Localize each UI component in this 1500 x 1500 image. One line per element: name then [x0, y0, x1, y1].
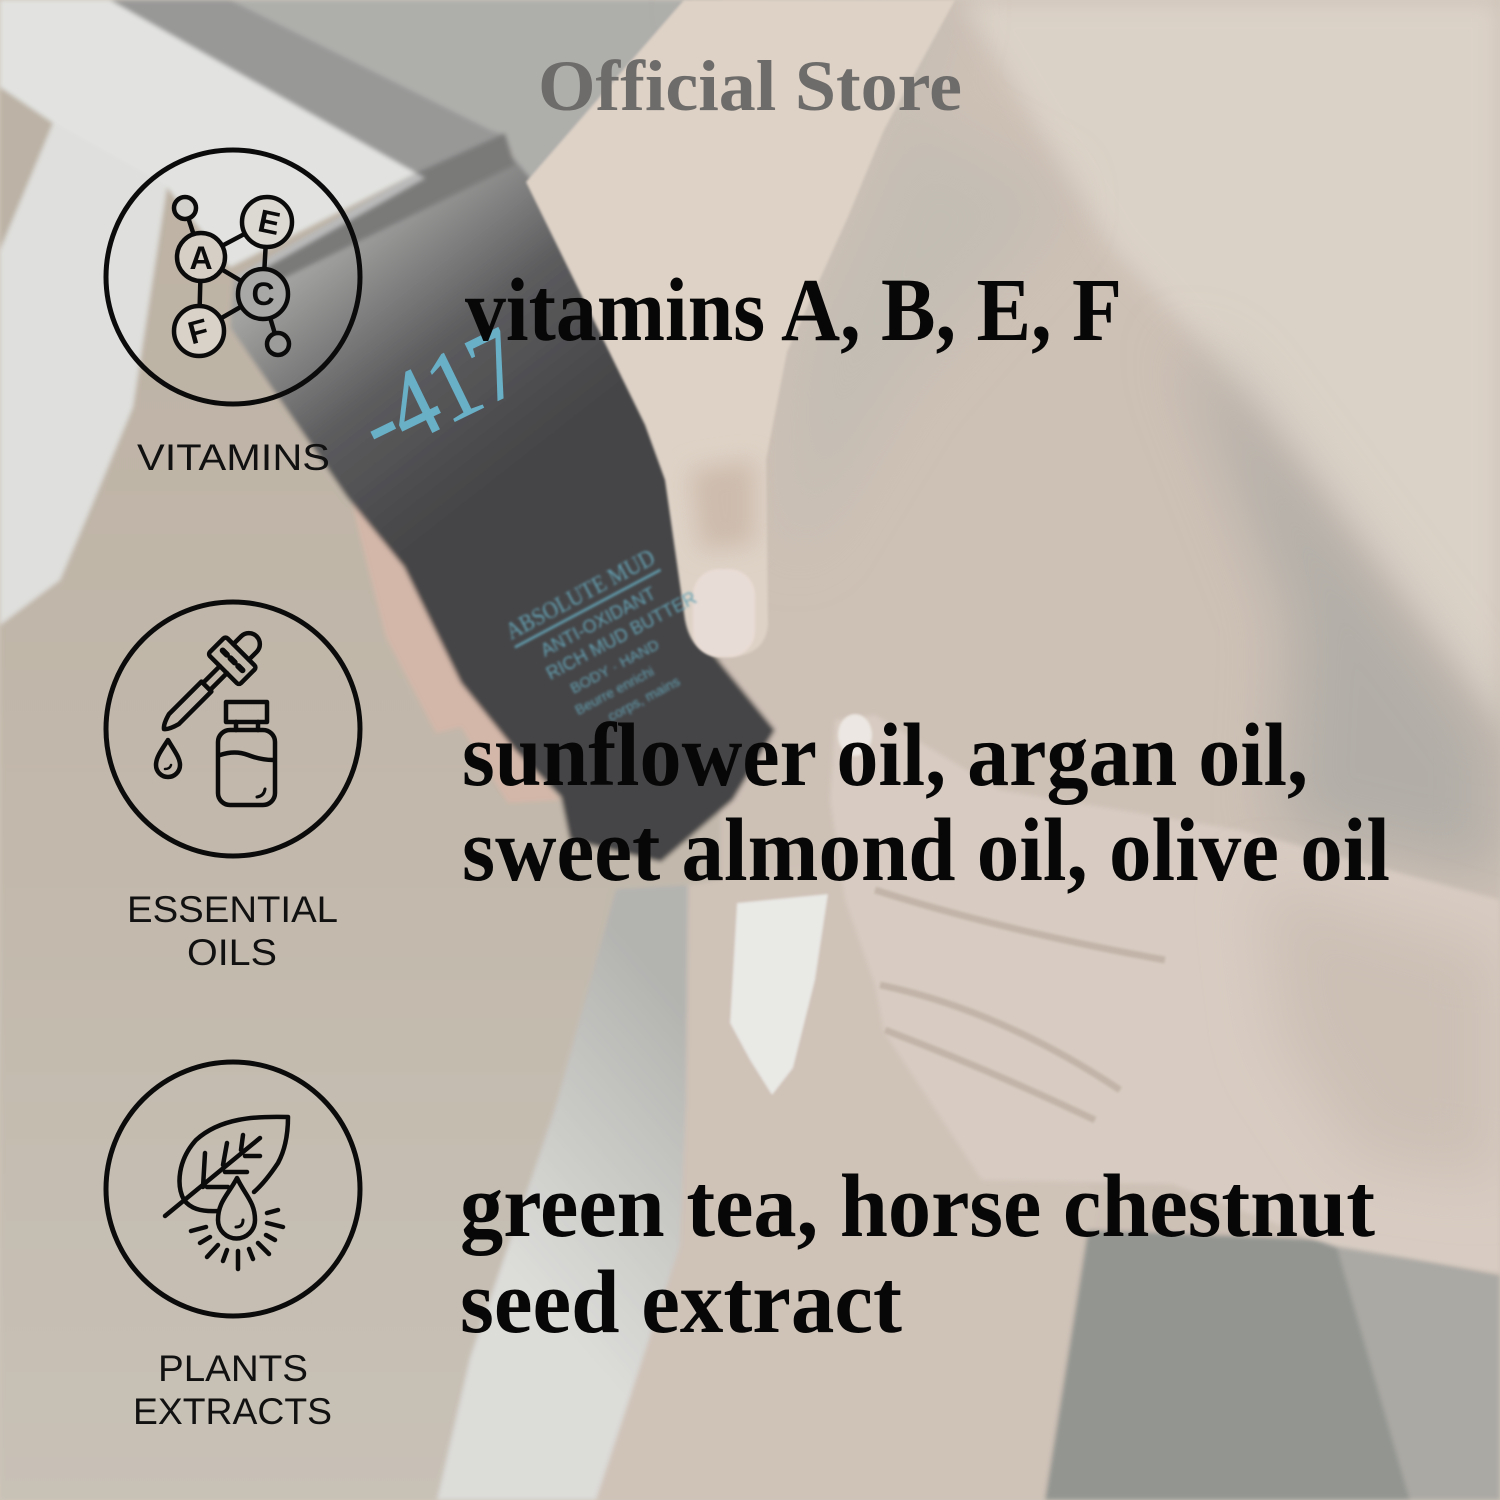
icon: dropper and bottle: [106, 602, 360, 856]
cream smear on leg: [730, 894, 828, 1095]
panel: essential oils row: [106, 602, 1390, 973]
icon: vitamins molecule: E: [255, 202, 283, 242]
printed product text on tube: ABSOLUTE MUD: [502, 545, 660, 645]
text: oils list: sweet almond oil, olive oil: [462, 801, 1390, 900]
panel: plant extracts row: [106, 1062, 1375, 1432]
thumb shading: [690, 460, 755, 550]
printed product text on tube: Beurre enrichi: [572, 663, 657, 718]
label: essential oils: ESSENTIAL: [127, 889, 338, 930]
text: extracts list: seed extract: [460, 1253, 902, 1352]
printed product text on tube: BODY · HAND: [568, 636, 662, 697]
printed logo on tube: -417: [341, 305, 539, 478]
label: essential oils: OILS: [187, 932, 277, 973]
text: extracts list: [460, 1157, 1375, 1352]
text: extracts list: green tea, horse chestnut: [460, 1157, 1375, 1256]
text: oils list: sunflower oil, argan oil,: [462, 706, 1308, 805]
text: vitamins list: vitamins A, B, E, F: [465, 261, 1122, 360]
icon: vitamins molecule: F: [184, 311, 212, 351]
icon: vitamins molecule: [106, 150, 360, 404]
text: oils list: [462, 706, 1390, 900]
icon: vitamins molecule: C: [251, 276, 275, 312]
upper hand holding tube: [526, 0, 955, 657]
printed product text on tube: ANTI-OXIDANT: [537, 583, 659, 661]
label: plants extracts: PLANTS: [158, 1348, 308, 1389]
soft shading on thigh: [700, 0, 1500, 880]
label: plants extracts: [133, 1348, 332, 1432]
printed product text on tube: corps, mains: [605, 673, 682, 724]
label: vitamins: VITAMINS: [137, 437, 330, 478]
panel: vitamins row: [106, 150, 1122, 478]
lower hand rubbing cream: [830, 714, 1500, 1273]
title: Official Store: [538, 46, 962, 126]
printed product text on tube: RICH MUD BUTTER: [543, 588, 700, 684]
icon: leaf with drop: [106, 1062, 360, 1316]
label: plants extracts: EXTRACTS: [133, 1391, 332, 1432]
printed product text on tube: [502, 536, 730, 748]
thumb nail: [693, 569, 755, 657]
label: essential oils: [127, 889, 338, 973]
icon: vitamins molecule: A: [189, 240, 213, 276]
